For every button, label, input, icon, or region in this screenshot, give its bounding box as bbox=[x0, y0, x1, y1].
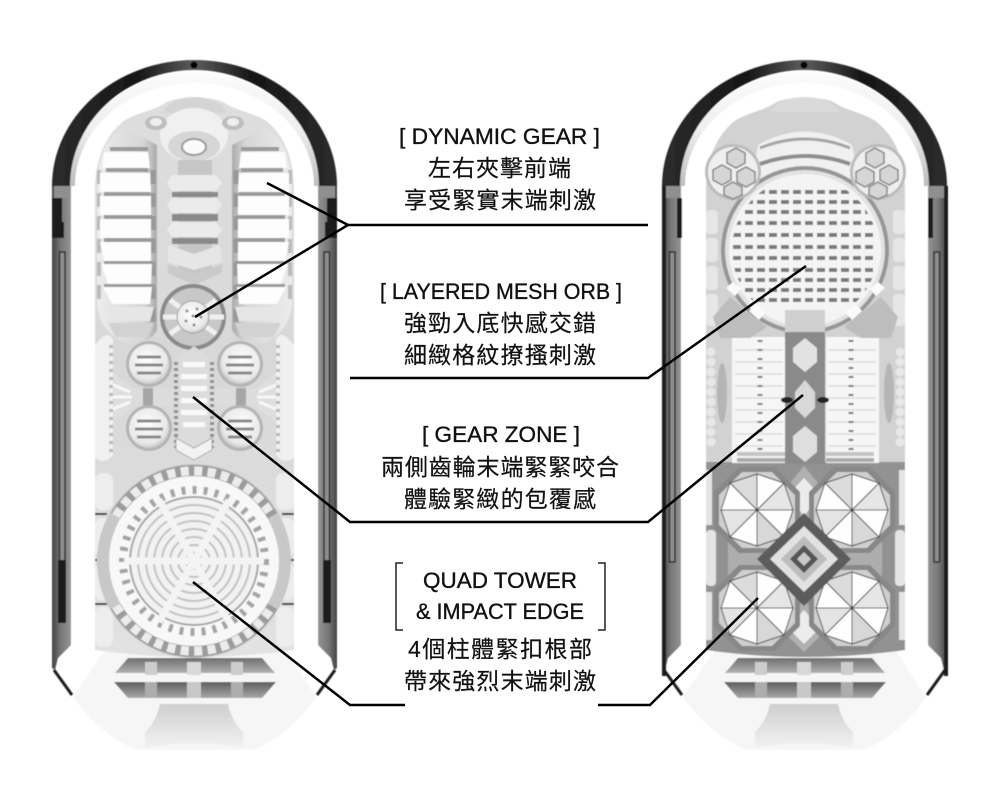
text block: layered mesh orb: 細緻格紋撩搔刺激 bbox=[404, 342, 596, 368]
text block: quad tower and impact edge: 帶來強烈末端刺激 bbox=[404, 668, 596, 694]
right unit black bar details bbox=[662, 186, 948, 676]
left unit interior body bbox=[95, 98, 294, 657]
right unit neck bbox=[785, 310, 825, 337]
leader line: dynamic gear bbox=[195, 183, 648, 317]
text block: dynamic gear: [ DYNAMIC GEAR ] bbox=[399, 124, 600, 149]
right unit lower dark base bbox=[706, 462, 905, 657]
left unit radial disc bbox=[97, 464, 291, 658]
left unit top knob bbox=[145, 97, 244, 162]
right product cutaway: mesh and tower side bbox=[662, 60, 948, 750]
leader line: gear zone bbox=[193, 395, 803, 522]
right unit mesh orb bbox=[721, 166, 889, 334]
text block: layered mesh orb bbox=[380, 279, 622, 368]
left unit black bar details bbox=[52, 198, 337, 623]
left unit centre rib column bbox=[167, 160, 222, 285]
text block: gear zone: [ GEAR ZONE ] bbox=[422, 422, 580, 447]
right unit centre diamond bbox=[757, 513, 851, 606]
right unit outer shell bbox=[662, 60, 947, 750]
bracket: quad tower right bbox=[598, 563, 605, 630]
right unit hex balls and struts bbox=[705, 144, 906, 338]
text block: gear zone bbox=[381, 422, 619, 512]
text block: dynamic gear: 左右夾擊前端 bbox=[428, 155, 571, 181]
text block: quad tower and impact edge bbox=[404, 568, 596, 694]
right unit mirrored side parts bbox=[706, 210, 905, 640]
text block: gear zone: 兩側齒輪末端緊緊咬合 bbox=[381, 454, 619, 480]
left unit mesh ball bbox=[160, 284, 226, 350]
right unit dome ribs bbox=[750, 97, 860, 190]
left unit bottom connector bbox=[113, 658, 277, 748]
text block: quad tower and impact edge: & IMPACT EDGE bbox=[416, 599, 584, 624]
text block: dynamic gear: 享受緊實末端刺激 bbox=[404, 187, 596, 213]
bracket: quad tower left bbox=[396, 563, 403, 630]
text block: quad tower and impact edge: QUAD TOWER bbox=[423, 568, 577, 593]
right unit centre ornament column bbox=[781, 332, 829, 464]
leader line: quad tower left bbox=[193, 582, 405, 705]
right unit upper and lower diamonds bbox=[780, 466, 828, 652]
right unit mid band between towers bbox=[728, 540, 882, 578]
leader line: quad tower right bbox=[598, 598, 758, 705]
left unit outer shell bbox=[52, 60, 337, 750]
left product cutaway: dynamic gear side bbox=[52, 60, 337, 750]
right unit bottom connector bbox=[723, 658, 887, 748]
text block: dynamic gear bbox=[399, 124, 600, 213]
left unit gear zone bbox=[95, 335, 294, 647]
right unit interior body bbox=[706, 98, 905, 657]
leader line: layered mesh orb bbox=[350, 266, 806, 378]
text block: layered mesh orb: 強勁入底快感交錯 bbox=[404, 310, 596, 336]
right unit four pinwheel towers bbox=[714, 467, 895, 651]
text block: layered mesh orb: [ LAYERED MESH ORB ] bbox=[380, 279, 622, 304]
text block: quad tower and impact edge: 4個柱體緊扣根部 bbox=[408, 636, 592, 662]
text block: gear zone: 體驗緊緻的包覆感 bbox=[404, 486, 596, 512]
left unit side gear columns bbox=[97, 128, 292, 343]
